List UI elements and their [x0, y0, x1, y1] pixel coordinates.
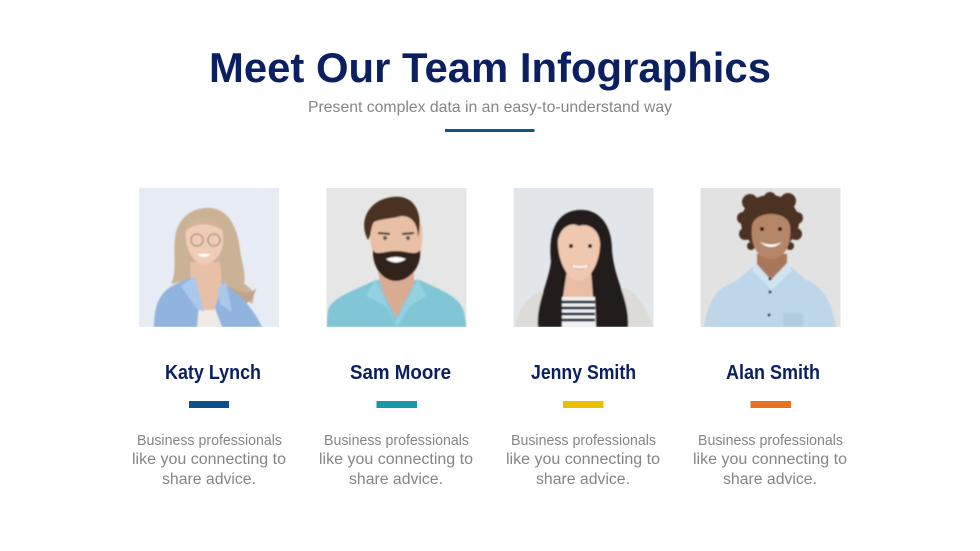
subtitle: Present complex data in an easy-to-understand way [308, 99, 672, 116]
description: Katy Lynch [132, 433, 286, 488]
description: Katy Lynch: share advice. [162, 471, 256, 488]
portrait: Sam Moore [326, 188, 466, 327]
title underline [445, 129, 534, 132]
portrait: Katy Lynch [139, 188, 279, 327]
description: Katy Lynch: Business professionals [137, 433, 282, 449]
description: Alan Smith: share advice. [723, 471, 817, 488]
accent bar: Alan Smith [750, 401, 791, 408]
description: Katy Lynch: like you connecting to [132, 451, 286, 468]
name: Katy Lynch: Katy Lynch [165, 362, 261, 384]
description: Sam Moore: share advice. [349, 471, 443, 488]
name: Jenny Smith: Jenny Smith [531, 362, 636, 384]
accent bar: Katy Lynch [189, 401, 229, 408]
description: Jenny Smith: like you connecting to [506, 451, 660, 468]
description: Alan Smith: Business professionals [698, 433, 843, 449]
description: Jenny Smith: share advice. [536, 471, 630, 488]
description: Sam Moore [319, 433, 473, 488]
accent bar: Jenny Smith [563, 401, 604, 408]
portrait: Jenny Smith [514, 188, 654, 327]
description: Sam Moore: like you connecting to [319, 451, 473, 468]
description: Alan Smith: like you connecting to [693, 451, 847, 468]
name: Sam Moore: Sam Moore [350, 362, 451, 384]
description: Alan Smith [693, 433, 847, 488]
description: Sam Moore: Business professionals [324, 433, 469, 449]
portrait: Alan Smith [700, 188, 840, 327]
accent bar: Sam Moore [376, 401, 417, 408]
description: Jenny Smith [506, 433, 660, 488]
description: Jenny Smith: Business professionals [511, 433, 656, 449]
title: Meet Our Team Infographics [209, 44, 771, 91]
name: Alan Smith: Alan Smith [726, 362, 820, 384]
